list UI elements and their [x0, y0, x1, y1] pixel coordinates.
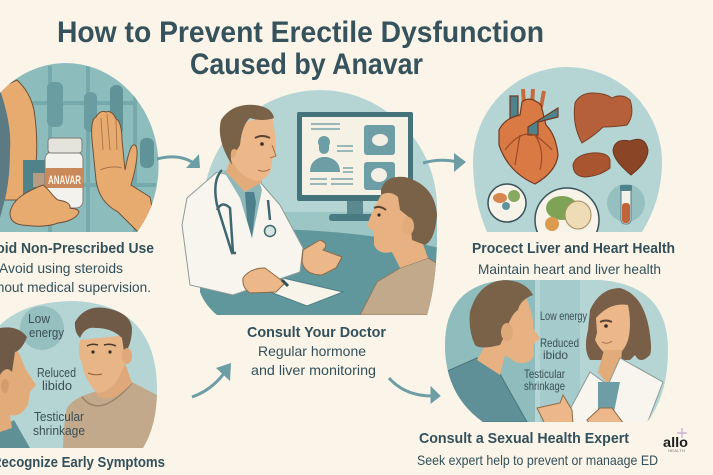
small plate: [488, 184, 526, 222]
description: Maintain heart and liver health: [478, 261, 661, 277]
symptom labels: energy: [29, 325, 64, 340]
arrow: doctor to organs: [423, 153, 466, 172]
symptom labels: [524, 311, 587, 393]
description: [251, 343, 376, 378]
large plate: [534, 187, 600, 232]
symptom labels: Testicular: [524, 367, 565, 381]
pill bottle: [45, 138, 83, 208]
illustration: doctor with patient: [195, 88, 440, 318]
allo health logo: allo: [663, 434, 688, 450]
pill bottle: ANAVAR: [48, 173, 81, 187]
symptom labels: ibido: [543, 348, 568, 362]
description: and liver monitoring: [251, 362, 376, 378]
heading: Consult Your Doctor: [247, 324, 386, 341]
symptom labels: libido: [42, 378, 72, 393]
allo health logo: [663, 428, 688, 453]
kidney slab: [573, 153, 610, 177]
panel: consult a sexual health expert: [417, 278, 670, 468]
symptom labels: shrinkage: [33, 423, 85, 438]
paper: [270, 278, 343, 306]
symptom labels: shrinkage: [524, 379, 565, 393]
panel: consult your doctor: [182, 88, 445, 378]
symptom labels: Low energy: [540, 311, 587, 323]
test tube: [607, 184, 645, 224]
liver: [574, 93, 632, 143]
panel: protect liver and heart health: [470, 64, 675, 277]
patient: [360, 177, 445, 315]
holding hand: [10, 185, 79, 226]
symptom labels: [28, 311, 85, 438]
symptom labels: Reduced: [540, 336, 579, 350]
title: [57, 16, 544, 81]
description: Avoid using steroids: [0, 260, 123, 276]
description: Seek expert help to prevent or manaage ED: [417, 452, 658, 468]
stop hand: [92, 111, 157, 232]
illustration: heart, liver and healthy food: [473, 67, 662, 232]
monitor: [297, 112, 413, 221]
heading: Consult a Sexual Health Expert: [419, 430, 629, 447]
small organ: [613, 139, 648, 175]
heart: [499, 89, 558, 184]
illustration: hand refusing Anavar bottle: [0, 60, 160, 235]
panel: avoid non-prescribed use: [0, 60, 160, 295]
description: [0, 260, 151, 295]
arrow: symptoms to doctor: [192, 363, 231, 397]
symptom labels: Testicular: [34, 409, 85, 424]
heading: Procect Liver and Heart Health: [472, 240, 675, 257]
description: Regular hormone: [258, 343, 366, 359]
arrow: doctor to expert: [389, 378, 440, 403]
illustration: man speaking with expert: [440, 278, 670, 424]
doctor: [182, 105, 342, 295]
arrow: avoid to doctor: [157, 154, 200, 168]
illustration: man with symptom labels: [0, 298, 160, 450]
symptom labels: Reluced: [37, 365, 76, 380]
title: Caused by Anavar: [190, 48, 423, 81]
allo health logo: HEALTH: [668, 448, 685, 453]
symptom labels: Low: [28, 311, 51, 326]
panel: recognize early symptoms: [0, 298, 165, 471]
title: How to Prevent Erectile Dysfunction: [57, 16, 544, 49]
